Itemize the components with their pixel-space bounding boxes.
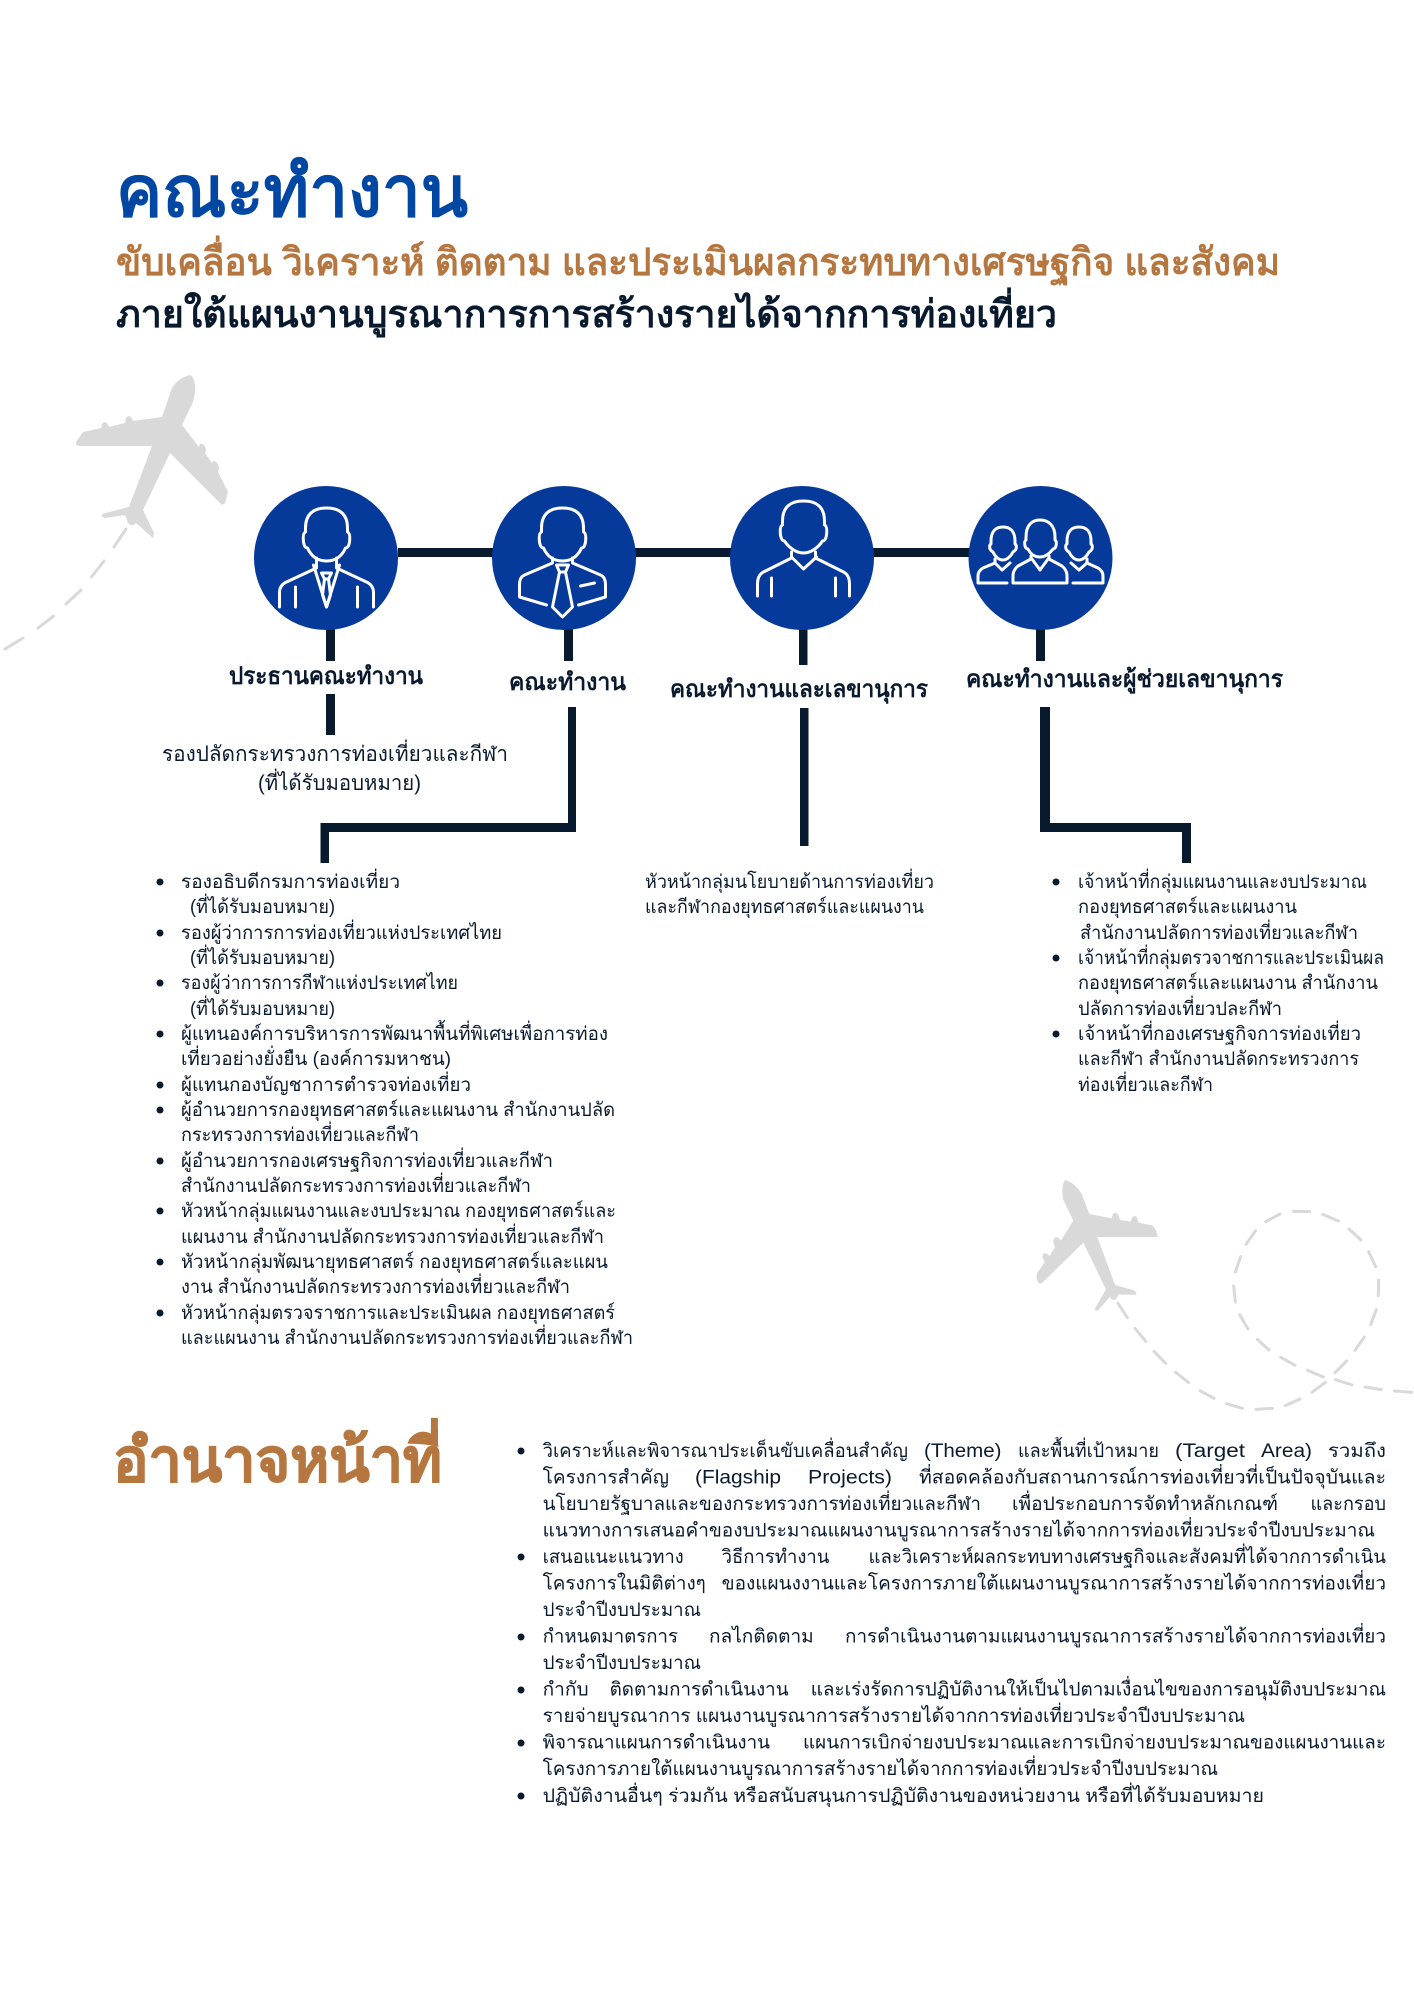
- list: working group members: ผู้อำนวยการกองเศรษฐกิจการท่องเที่ยวและกีฬา: [181, 1147, 553, 1172]
- list: duties: [518, 1437, 1386, 1808]
- list: working group members: หัวหน้ากลุ่มตรวจราชการและประเมินผล กองยุทธศาสตร์: [181, 1302, 615, 1325]
- list: working group members: (ที่ได้รับมอบหมาย): [190, 944, 335, 969]
- list: working group members: [156, 868, 633, 1349]
- list: assistant secretary members: เจ้าหน้าที่กลุ่มตรวจาชการและประเมินผล: [1078, 944, 1384, 970]
- list: duties: แผนการเบิกจ่ายงบประมาณและการเบิกจ่ายงบประมาณของแผนงานและ: [803, 1732, 1386, 1754]
- list: working group members: กระทรวงการท่องเที่ยวและกีฬา: [181, 1121, 419, 1146]
- text block: secretary members: [645, 868, 934, 919]
- icon: secretary: [730, 486, 874, 630]
- list: working group members: แผนงาน สำนักงานปลัดกระทรวงการท่องเที่ยวและกีฬา: [181, 1223, 604, 1248]
- text block: chairman detail: [162, 739, 508, 795]
- list: duties: รวมถึง: [1328, 1441, 1386, 1462]
- icon: working group member with tie: [492, 486, 636, 630]
- list: assistant secretary members: กองยุทธศาสตร์และแผนงาน: [1078, 896, 1297, 919]
- list: duties: Projects): [808, 1468, 892, 1488]
- title: คณะทำงาน: [116, 153, 468, 232]
- list: assistant secretary members: สำนักงานปลัดการท่องเที่ยวและกีฬา: [1080, 919, 1358, 944]
- icon: airplane lower right with dashed loop trail: [1037, 1180, 1412, 1409]
- list: working group members: รองอธิบดีกรมการท่องเที่ยว: [181, 868, 400, 893]
- list: duties: โครงการภายใต้แผนงานบูรณาการสร้างรายได้จากการท่องเที่ยวประจำปีงบประมาณ: [543, 1755, 1218, 1780]
- list: duties: ประจำปีงบประมาณ: [543, 1599, 701, 1621]
- list: duties: แนวทางการเสนอคำของบประมาณแผนงานบูรณาการสร้างรายได้จากการท่องเที่ยวประจำปีงบประมาณ: [543, 1516, 1375, 1542]
- heading: duties: อำนาจหน้าที่: [113, 1418, 442, 1494]
- list: working group members: ผู้แทนกองบัญชาการตำรวจท่องเที่ยว: [181, 1071, 471, 1096]
- subtitle: dark: ภายใต้แผนงานบูรณาการการสร้างรายได้จากการท่องเที่ยว: [116, 287, 1057, 338]
- list: duties: วิธีการทำงาน: [721, 1546, 829, 1568]
- label: working group and secretary: คณะทำงานและเลขานุการ: [670, 676, 928, 705]
- label: working group: คณะทำงาน: [509, 669, 627, 696]
- list: working group members: ผู้อำนวยการกองยุทธศาสตร์และแผนงาน สำนักงานปลัด: [181, 1099, 615, 1122]
- list: duties: (Theme): [924, 1441, 1002, 1462]
- list: duties: ที่สอดคล้องกับสถานการณ์การท่องเที่ยวที่เป็นปัจจุบันและ: [919, 1464, 1386, 1490]
- list: duties: และพื้นที่เป้าหมาย: [1018, 1437, 1159, 1462]
- label: chairman: ประธานคณะทำงาน: [229, 663, 424, 690]
- list: working group members: (ที่ได้รับมอบหมาย): [190, 995, 335, 1020]
- list: duties: โครงการสำคัญ: [543, 1466, 669, 1488]
- list: duties: (Target: [1175, 1441, 1246, 1462]
- list: duties: ของแผนงงานและโครงการภายใต้แผนงานบูรณาการสร้างรายได้จากการท่องเที่ยว: [722, 1570, 1386, 1594]
- list: duties: เพื่อประกอบการจัดทำหลักเกณฑ์: [1012, 1490, 1278, 1515]
- org chart connectors: [320, 548, 1191, 863]
- list: duties: ติดตามการดำเนินงาน: [610, 1680, 789, 1700]
- list: assistant secretary members: ปลัดการท่องเที่ยวปละกีฬา: [1078, 995, 1282, 1020]
- list: assistant secretary members: [1052, 868, 1384, 1096]
- list: duties: การดำเนินงานตามแผนงานบูรณาการสร้างรายได้จากการท่องเที่ยว: [845, 1622, 1386, 1648]
- text block: chairman detail: รองปลัดกระทรวงการท่องเที่ยวและกีฬา: [162, 739, 508, 766]
- list: duties: และวิเคราะห์ผลกระทบทางเศรษฐกิจและสังคมที่ได้จากการดำเนิน: [868, 1543, 1386, 1568]
- list: working group members: รองผู้ว่าการการกีฬาแห่งประเทศไทย: [181, 972, 458, 994]
- text block: secretary members: และกีฬากองยุทธศาสตร์และแผนงาน: [645, 896, 924, 919]
- list: duties: นโยบายรัฐบาลและของกระทรวงการท่องเที่ยวและกีฬา: [543, 1490, 981, 1515]
- label: working group and assistant secretary: คณะทำงานและผู้ช่วยเลขานุการ: [966, 666, 1283, 695]
- list: working group members: หัวหน้ากลุ่มแผนงานและงบประมาณ กองยุทธศาสตร์และ: [181, 1200, 616, 1223]
- list: duties: Area): [1261, 1441, 1312, 1462]
- icon: airplane top left with dashed trail: [5, 375, 228, 649]
- list: assistant secretary members: กองยุทธศาสตร์และแผนงาน สำนักงาน: [1078, 972, 1378, 995]
- list: duties: รายจ่ายบูรณาการ แผนงานบูรณาการสร้างรายได้จากการท่องเที่ยวประจำปีงบประมาณ: [543, 1702, 1245, 1727]
- list: working group members: เที่ยวอย่างยั่งยืน (องค์การมหาชน): [181, 1045, 451, 1070]
- list: working group members: งาน สำนักงานปลัดกระทรวงการท่องเที่ยวและกีฬา: [181, 1273, 570, 1298]
- text block: chairman detail: (ที่ได้รับมอบหมาย): [258, 768, 421, 795]
- list: assistant secretary members: เจ้าหน้าที่กลุ่มแผนงานและงบประมาณ: [1078, 868, 1367, 894]
- list: duties: และกรอบ: [1310, 1494, 1386, 1515]
- list: duties: กำหนดมาตรการ: [543, 1626, 678, 1648]
- list: working group members: สำนักงานปลัดกระทรวงการท่องเที่ยวและกีฬา: [181, 1172, 531, 1197]
- list: duties: ประจำปีงบประมาณ: [543, 1652, 701, 1674]
- list: duties: (Flagship: [695, 1468, 781, 1488]
- list: assistant secretary members: ท่องเที่ยวและกีฬา: [1078, 1071, 1213, 1096]
- list: working group members: ผู้แทนองค์การบริหารการพัฒนาพื้นที่พิเศษเพื่อการท่อง: [181, 1020, 608, 1045]
- list: duties: เสนอแนะแนวทาง: [543, 1547, 684, 1568]
- list: working group members: และแผนงาน สำนักงานปลัดกระทรวงการท่องเที่ยวและกีฬา: [181, 1324, 633, 1349]
- list: duties: กลไกติดตาม: [709, 1626, 814, 1648]
- list: duties: และเร่งรัดการปฏิบัติงานให้เป็นไปตามเงื่อนไขของการอนุมัติงบประมาณ: [811, 1676, 1386, 1702]
- text block: secretary members: หัวหน้ากลุ่มนโยบายด้านการท่องเที่ยว: [645, 868, 934, 894]
- list: duties: วิเคราะห์และพิจารณาประเด็นขับเคลื่อนสำคัญ: [542, 1437, 908, 1462]
- icon: chairman in suit: [254, 486, 398, 630]
- list: duties: กำกับ: [543, 1680, 589, 1700]
- subtitle: orange: ขับเคลื่อน วิเคราะห์ ติดตาม และประเมินผลกระทบทางเศรษฐกิจ และสังคม: [116, 235, 1280, 287]
- list: duties: พิจารณาแผนการดำเนินงาน: [543, 1732, 770, 1754]
- list: assistant secretary members: เจ้าหน้าที่กองเศรษฐกิจการท่องเที่ยว: [1078, 1020, 1361, 1045]
- icon: three people group: [968, 486, 1112, 630]
- list: working group members: รองผู้ว่าการการท่องเที่ยวแห่งประเทศไทย: [181, 919, 502, 944]
- list: duties: ปฏิบัติงานอื่นๆ ร่วมกัน หรือสนับสนุนการปฏิบัติงานของหน่วยงาน หรือที่ได้รับมอบหมาย: [543, 1782, 1264, 1808]
- list: duties: โครงการในมิติต่างๆ: [543, 1572, 706, 1594]
- list: working group members: หัวหน้ากลุ่มพัฒนายุทธศาสตร์ กองยุทธศาสตร์และแผน: [181, 1251, 608, 1274]
- list: assistant secretary members: และกีฬา สำนักงานปลัดกระทรวงการ: [1078, 1048, 1359, 1070]
- list: working group members: (ที่ได้รับมอบหมาย): [190, 893, 335, 918]
